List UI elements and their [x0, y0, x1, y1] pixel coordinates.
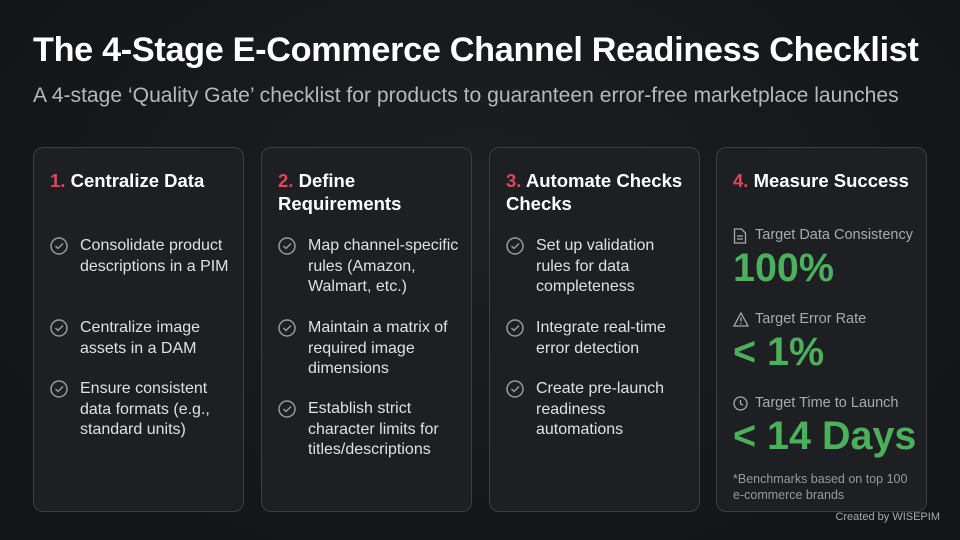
- panel: automate checks: [489, 147, 700, 512]
- bullet: [506, 319, 666, 356]
- bullet: Consolidate product: [80, 237, 222, 254]
- bullet: [278, 400, 439, 458]
- bullet: rules for data: [536, 258, 629, 274]
- panel: centralize data: [33, 147, 244, 512]
- bullet: Set up validation: [536, 237, 654, 254]
- metric value: < 14 Days: [733, 414, 916, 458]
- metric label: time to launch: Target Time to Launch: [755, 395, 898, 411]
- credit: Created by WISEPIM: [835, 511, 940, 523]
- heading: 1. Centralize Data: [50, 170, 204, 191]
- subtitle: A 4-stage ‘Quality Gate’ checklist for products to guaranteen error-free marketplace launches: [33, 84, 899, 107]
- metric value: 100%: [733, 246, 834, 290]
- bullet: Ensure consistent: [80, 380, 207, 397]
- bullet: required image: [308, 340, 415, 356]
- bullet: readiness: [536, 400, 605, 418]
- bullet: [278, 319, 448, 377]
- heading: 4. Measure Success: [733, 170, 909, 191]
- bullet: Create pre-launch: [536, 380, 664, 397]
- bullet: descriptions in a PIM: [80, 258, 229, 274]
- bullet: Establish strict: [308, 400, 411, 417]
- bullet: Centralize image: [80, 319, 200, 336]
- footnote: e-commerce brands: [733, 488, 844, 502]
- bullet: [506, 380, 664, 438]
- footnote: *Benchmarks based on top 100: [733, 472, 907, 486]
- bullet: standard units): [80, 421, 186, 438]
- bullet: assets in a DAM: [80, 340, 196, 356]
- metric label: error rate: Target Error Rate: [755, 311, 866, 327]
- panel: define requirements: [261, 147, 472, 512]
- bullet: Walmart, etc.): [308, 278, 407, 295]
- bullet: Integrate real-time: [536, 319, 666, 336]
- bullet: [50, 380, 210, 438]
- bullet: character limits for: [308, 420, 439, 438]
- heading: [278, 170, 401, 214]
- bullet: Maintain a matrix of: [308, 319, 448, 336]
- bullet: titles/descriptions: [308, 441, 431, 458]
- heading: Checks: [506, 193, 572, 214]
- heading: 2. Define: [278, 170, 355, 191]
- bullet: completeness: [536, 278, 635, 295]
- bullet: error detection: [536, 340, 639, 356]
- footnote: [733, 472, 907, 502]
- metric label: consistency: Target Data Consistency: [755, 227, 913, 243]
- bullet: [50, 319, 200, 356]
- bullet: Map channel-specific: [308, 237, 458, 254]
- panel: measure success: [716, 147, 927, 512]
- bullet: [506, 237, 654, 295]
- heading: Requirements: [278, 193, 401, 214]
- bullet: dimensions: [308, 360, 389, 377]
- bullet: automations: [536, 421, 623, 438]
- heading: [506, 170, 682, 214]
- bullet: [50, 237, 229, 274]
- title: The 4-Stage E-Commerce Channel Readiness Checklist: [33, 31, 919, 69]
- bullet: rules (Amazon,: [308, 258, 416, 274]
- metric value: < 1%: [733, 330, 824, 374]
- bullet: [278, 237, 458, 295]
- bullet: data formats (e.g.,: [80, 400, 210, 418]
- heading: 3. Automate Checks: [506, 170, 682, 191]
